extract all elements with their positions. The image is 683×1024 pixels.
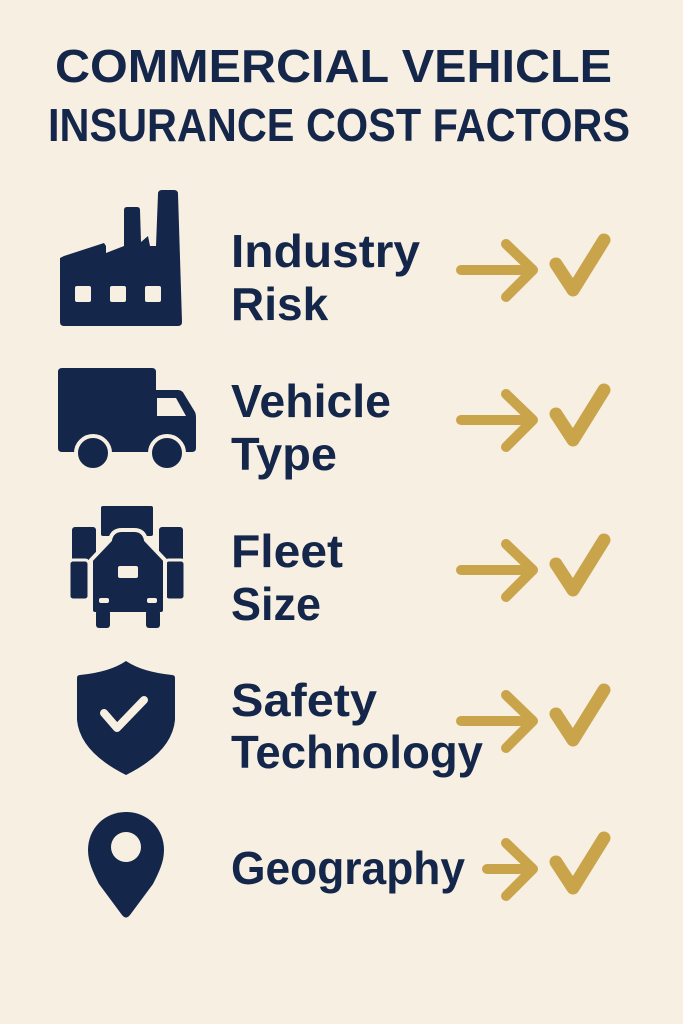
label: geography: Geography <box>231 842 465 894</box>
label: safety technology <box>231 674 483 778</box>
arrow + check 1 <box>461 240 604 297</box>
arrow + check 4 <box>461 690 604 748</box>
title: INSURANCE COST FACTORS <box>48 99 630 151</box>
arrow + check 5 <box>487 838 604 896</box>
label: vehicle type: Vehicle <box>231 375 391 427</box>
title: COMMERCIAL VEHICLE <box>55 40 612 92</box>
label: fleet size <box>231 525 343 630</box>
label: industry risk <box>231 225 420 330</box>
icon: shield <box>77 661 175 775</box>
icon: location pin <box>88 812 164 918</box>
label: safety technology: Safety <box>231 674 377 726</box>
icon: fleet <box>69 506 185 628</box>
icon: truck <box>58 368 196 470</box>
title <box>48 40 630 151</box>
label: fleet size: Size <box>231 578 321 630</box>
label: industry risk: Risk <box>231 278 329 330</box>
icon: factory <box>60 190 182 326</box>
label: vehicle type: Type <box>231 428 337 480</box>
label: safety technology: Technology <box>231 726 483 778</box>
arrow + check 2 <box>461 390 604 447</box>
arrow + check 3 <box>461 540 604 597</box>
label: industry risk: Industry <box>231 225 420 277</box>
label: vehicle type <box>231 375 391 480</box>
label: fleet size: Fleet <box>231 525 343 577</box>
